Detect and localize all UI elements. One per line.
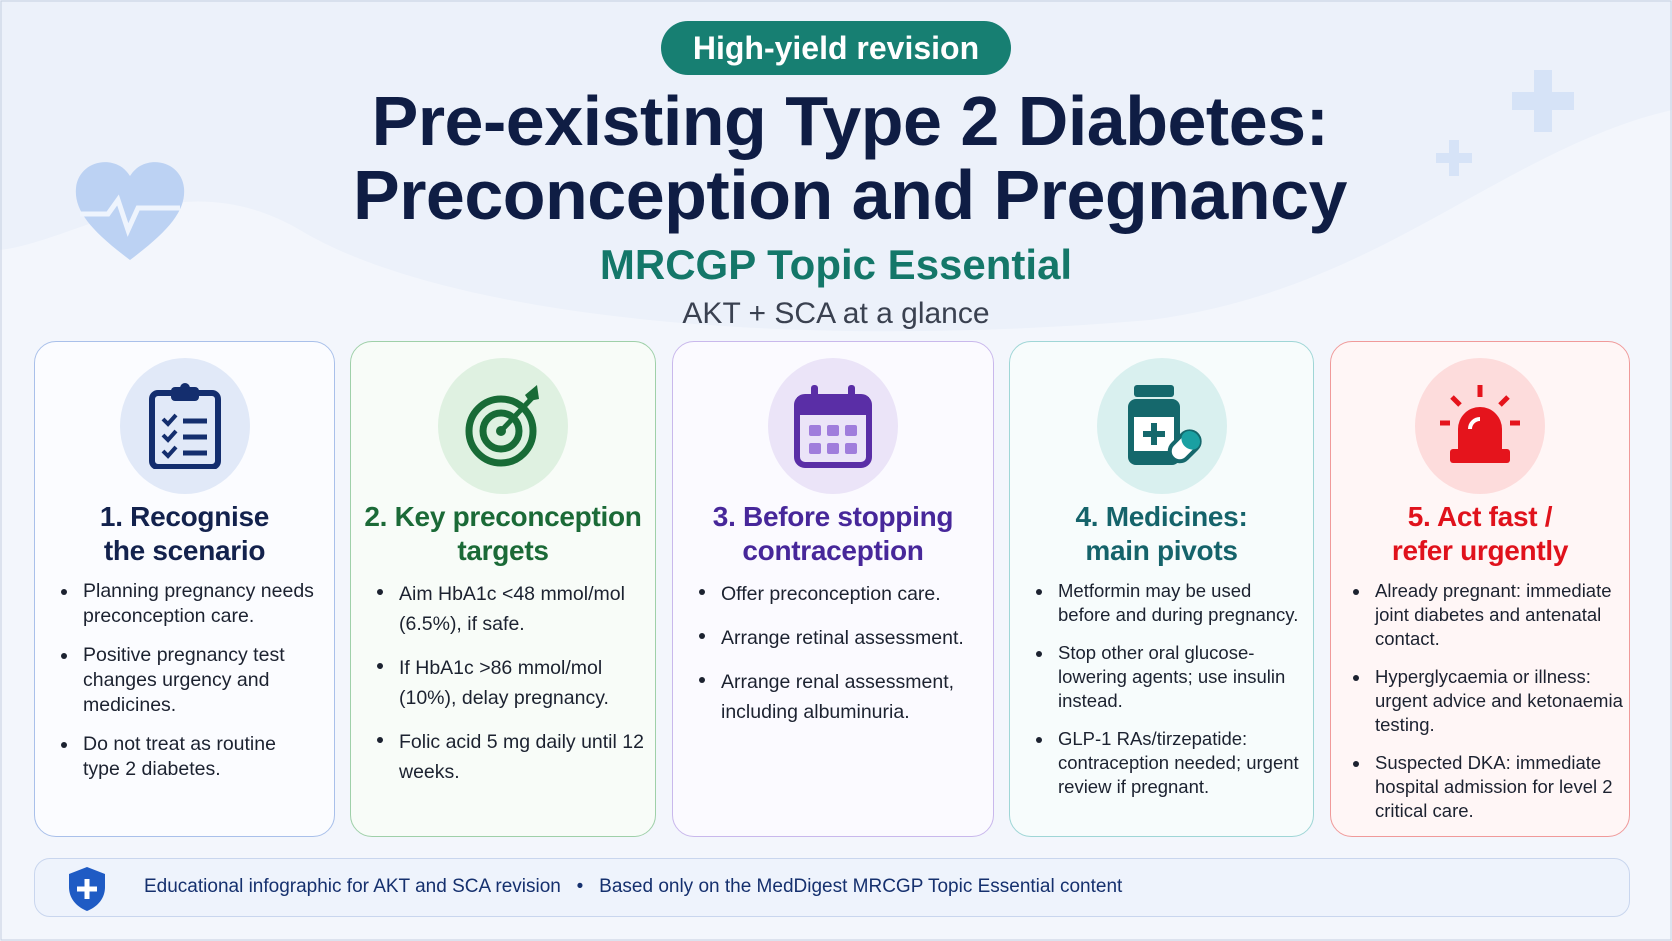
- pill: High-yield revision: High-yield revision: [693, 30, 979, 66]
- bullets: Folic acid 5 mg daily until 12 weeks.: [399, 731, 644, 783]
- subtitle: MRCGP Topic Essential: [600, 241, 1072, 288]
- footer text: Educational infographic for AKT and SCA revision • Based only on the MedDigest MRCGP Topic Essential content: [144, 876, 1122, 897]
- bullets: [61, 580, 314, 780]
- bullets: Aim HbA1c <48 mmol/mol (6.5%), if safe.: [399, 583, 625, 635]
- icon: clipboard: [120, 358, 250, 494]
- panel: 5 act fast: [1330, 341, 1630, 837]
- heading: the scenario: [104, 535, 265, 566]
- icon: heart: [76, 162, 184, 260]
- panel: 2 targets: [350, 341, 656, 837]
- bullets: Offer preconception care.: [721, 583, 941, 605]
- heading: main pivots: [1085, 535, 1238, 566]
- bullets: GLP-1 RAs/tirzepatide: contraception needed; urgent review if pregnant.: [1058, 728, 1299, 797]
- icon: target: [438, 358, 568, 494]
- heading: targets: [457, 535, 549, 566]
- bullets: Do not treat as routine type 2 diabetes.: [83, 733, 276, 780]
- panel: 4 medicines: [1009, 341, 1314, 837]
- bullets: Already pregnant: immediate joint diabetes and antenatal contact.: [1375, 580, 1612, 649]
- heading: 5. Act fast /: [1408, 501, 1552, 532]
- footer bar: [34, 858, 1630, 917]
- bullets: [377, 583, 644, 783]
- heading: refer urgently: [1392, 535, 1568, 566]
- bullets: Metformin may be used before and during pregnancy.: [1058, 580, 1298, 625]
- icon: medicine bottle: [1096, 358, 1226, 494]
- heading: [364, 501, 642, 566]
- bullets: [699, 583, 964, 723]
- heading: 4. Medicines:: [1076, 501, 1247, 532]
- icon: shield: [69, 867, 105, 911]
- title: [353, 82, 1347, 234]
- icon: calendar: [768, 358, 898, 494]
- bullets: Arrange retinal assessment.: [721, 627, 964, 649]
- bullets: Stop other oral glucose-lowering agents; use insulin instead.: [1058, 642, 1285, 711]
- heading: 2. Key preconception: [364, 501, 642, 532]
- bullets: Suspected DKA: immediate hospital admission for level 2 critical care.: [1375, 752, 1613, 821]
- bullets: If HbA1c >86 mmol/mol (10%), delay pregnancy.: [399, 657, 609, 709]
- bullets: Hyperglycaemia or illness: urgent advice and ketonaemia testing.: [1375, 666, 1623, 735]
- bullets: Arrange renal assessment, including albuminuria.: [721, 671, 954, 723]
- tagline: AKT + SCA at a glance: [682, 297, 990, 330]
- icon: alarm light: [1415, 358, 1545, 494]
- bullets: [1353, 580, 1623, 821]
- panel: 1 recognise: [34, 341, 335, 837]
- panel: 3 contraception: [672, 341, 994, 837]
- heading: contraception: [742, 535, 924, 566]
- title: Pre-existing Type 2 Diabetes:: [372, 82, 1328, 160]
- bullets: Planning pregnancy needs preconception care.: [83, 580, 314, 627]
- heading: [100, 501, 269, 566]
- decorative crosses: [1512, 70, 1574, 132]
- decorative small cross: [1436, 140, 1472, 176]
- title: Preconception and Pregnancy: [353, 156, 1347, 234]
- bullets: [1036, 580, 1299, 797]
- bullets: Positive pregnancy test changes urgency and medicines.: [83, 644, 285, 716]
- heading: 1. Recognise: [100, 501, 269, 532]
- heading: 3. Before stopping: [713, 501, 953, 532]
- heading: [1392, 501, 1568, 566]
- pill: High-yield revision: [661, 21, 1011, 75]
- heading: [713, 501, 953, 566]
- heading: [1076, 501, 1247, 566]
